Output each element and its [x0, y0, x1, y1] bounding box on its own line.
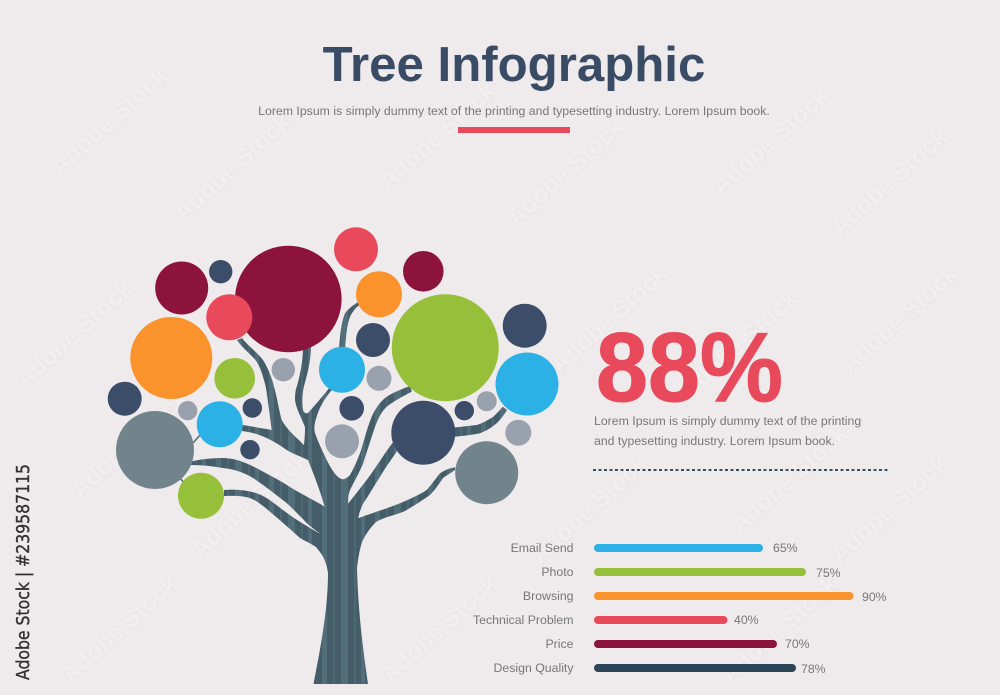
circles [108, 227, 558, 519]
circle: maroon small left [155, 262, 208, 314]
bar row: Technical Problem: Technical Problem [473, 613, 574, 627]
circle: blue left [197, 401, 243, 447]
watermark pattern: Adobe Stock [707, 83, 834, 201]
watermark pattern: Adobe Stock [374, 78, 501, 196]
watermark pattern: Adobe Stock [716, 571, 843, 689]
circle: green large [392, 294, 499, 401]
circle: navy lower centre [339, 396, 364, 421]
title accent bar [458, 127, 570, 133]
bar row: Technical Problem [473, 613, 759, 627]
dashed divider [593, 469, 890, 471]
stock id vertical text: Adobe Stock | #239587115 [13, 464, 34, 680]
watermark pattern: Adobe Stock [56, 571, 183, 689]
bar row: Photo [541, 565, 841, 580]
circle: navy large [391, 401, 455, 465]
circle: navy dot left upper [243, 398, 262, 418]
circle: slate right [455, 441, 518, 504]
circle: blue right [496, 352, 558, 416]
big percentage: 88% [596, 312, 783, 422]
circle: maroon large [235, 246, 342, 352]
bar row: Design Quality: 78% [801, 662, 826, 676]
circle: slate large left [116, 411, 194, 489]
watermark pattern: Adobe Stock [826, 124, 953, 242]
bar row: Browsing: 90% [862, 590, 887, 604]
circle: navy far left [108, 382, 142, 416]
bar row: Design Quality [494, 661, 826, 676]
watermark pattern: Adobe Stock [502, 114, 629, 232]
bar row: Price: Price [545, 637, 574, 651]
bar row: Photo: Photo [541, 565, 574, 579]
watermark pattern: Adobe Stock [169, 109, 296, 227]
circle: red left [206, 294, 252, 340]
circle: orange large [130, 317, 212, 399]
bar row: Email Send: 65% [773, 541, 798, 555]
bar row: Browsing: Browsing [523, 589, 574, 603]
circle: red top [334, 227, 378, 271]
bar row: Price [545, 637, 810, 651]
branch: upper twig to orange circle [339, 301, 361, 350]
bar row: Price: 70% [785, 637, 810, 651]
bar row: Email Send [511, 541, 798, 555]
watermark pattern: Adobe Stock [726, 421, 853, 539]
bar row: Browsing [523, 589, 887, 604]
description text [594, 414, 861, 448]
circle: navy centre [356, 323, 390, 357]
circle: grey centre [272, 358, 295, 381]
circle: grey lower centre [325, 424, 359, 458]
title: Tree Infographic [323, 37, 705, 92]
circle: maroon top right [403, 251, 444, 292]
branch: thin twigs [180, 434, 201, 484]
branch: right twig to blue circle [450, 407, 507, 437]
bar row: Photo: 75% [816, 566, 841, 580]
watermark pattern: Adobe Stock [526, 451, 653, 569]
circle: navy upper right [503, 304, 547, 348]
circle: green small [214, 358, 255, 399]
circle: grey centre right [366, 366, 392, 391]
bar chart [473, 541, 887, 676]
watermark pattern: Adobe Stock [676, 286, 803, 404]
circle: green bottom left [178, 473, 224, 519]
subtitle: Lorem Ipsum is simply dummy text of the printing and typesetting industry. Lorem Ipsum book. [258, 104, 770, 118]
bar row: Email Send: Email Send [511, 541, 574, 555]
circle: grey dot right [477, 391, 497, 411]
watermark pattern: Adobe Stock [66, 386, 193, 504]
tree trunk and branches [191, 338, 455, 684]
circle: orange top [356, 271, 402, 317]
description text: Lorem Ipsum is simply dummy text of the printing [594, 414, 861, 428]
tree illustration [108, 227, 558, 684]
bar row: Technical Problem: 40% [734, 613, 759, 627]
circle: grey right [505, 420, 531, 446]
circle: navy dot left lower [240, 440, 260, 459]
bar row: Design Quality: Design Quality [494, 661, 574, 675]
watermark pattern: Adobe Stock [546, 261, 673, 379]
watermark pattern: Adobe Stock [826, 451, 953, 569]
watermark pattern: Adobe Stock [46, 63, 173, 181]
circle: navy top [209, 260, 232, 283]
watermark pattern: Adobe Stock [376, 571, 503, 689]
watermark pattern: Adobe Stock [836, 261, 963, 379]
circle: blue centre [319, 347, 365, 393]
watermark pattern: Adobe Stock [11, 276, 138, 394]
watermark pattern: Adobe Stock [186, 446, 313, 564]
circle: navy dot right [455, 401, 474, 420]
circle: grey small left [178, 401, 197, 420]
description text: and typesetting industry. Lorem Ipsum book. [594, 434, 835, 448]
